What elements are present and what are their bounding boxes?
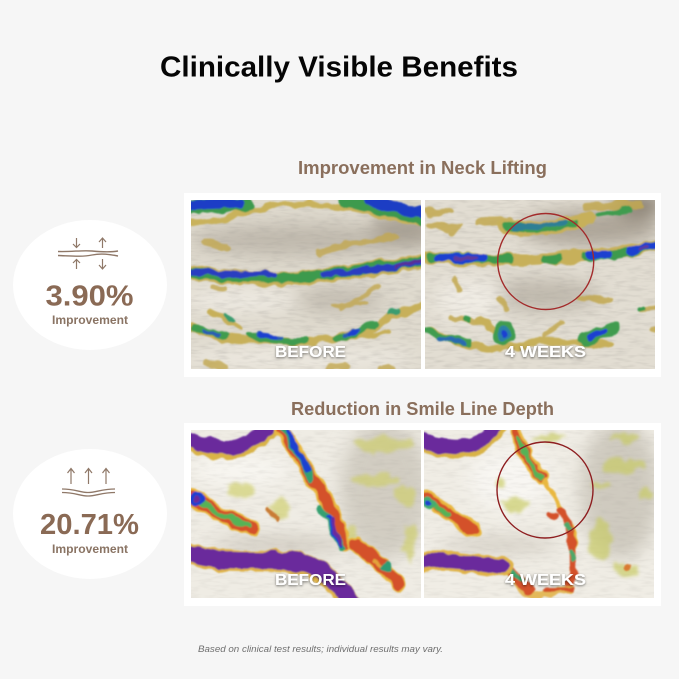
stat badge: neck lifting — [13, 220, 167, 350]
panel: smile line images — [184, 420, 661, 606]
icon: wrinkle lines with arrows — [62, 468, 115, 496]
image: neck 4 weeks — [425, 193, 665, 369]
image: smile 4 weeks — [419, 420, 660, 598]
label: before: BEFORE — [275, 572, 346, 589]
label: before: BEFORE — [275, 344, 346, 361]
panel: neck lifting images — [180, 193, 665, 377]
heading: smile line: Reduction in Smile Line Depth — [291, 399, 554, 419]
callout circle: smile line — [497, 442, 593, 538]
footnote: Based on clinical test results; individual results may vary. — [198, 644, 443, 654]
label: 4 weeks: 4 WEEKS — [505, 344, 586, 361]
title: Clinically Visible Benefits — [160, 52, 518, 84]
stat label: Improvement — [52, 315, 128, 327]
stat value: 3.90% — [46, 280, 134, 312]
stat badge: smile line — [13, 449, 167, 579]
image: neck before — [191, 200, 421, 369]
stat label: Improvement — [52, 544, 128, 556]
label: 4 weeks: 4 WEEKS — [505, 572, 586, 589]
icon: lifting lines with arrows — [58, 238, 118, 269]
callout circle: neck — [498, 214, 594, 310]
heading: neck lifting: Improvement in Neck Lifting — [298, 158, 547, 178]
image: smile before — [191, 430, 421, 598]
stat value: 20.71% — [40, 509, 139, 541]
